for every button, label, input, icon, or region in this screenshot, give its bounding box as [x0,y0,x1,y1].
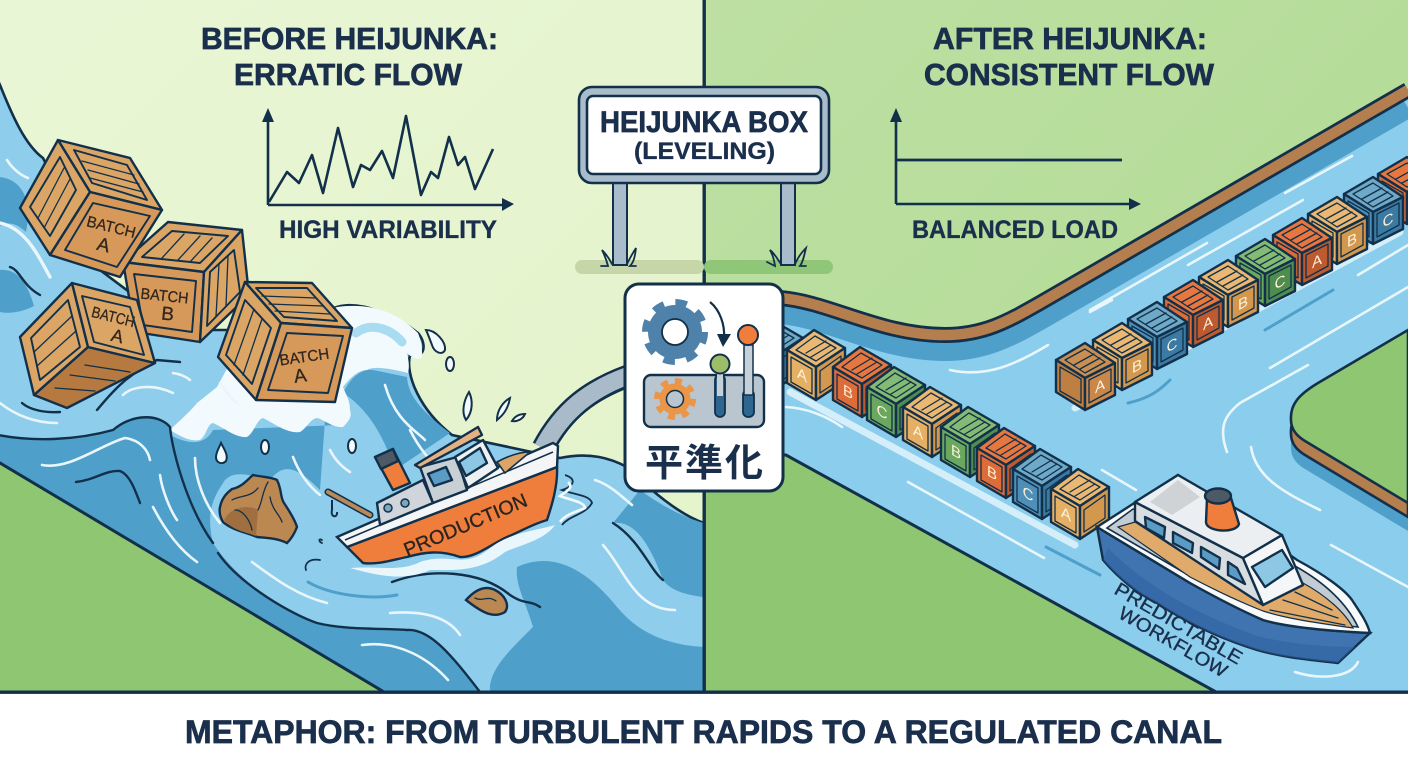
control panel [644,375,764,427]
connector pipe [543,376,628,452]
text: kanji label: 平準化 [645,432,763,487]
cube: B: B [987,462,997,485]
cube: C: C [1275,272,1285,294]
cube: C [1236,239,1295,306]
cube: C: C [1167,335,1177,357]
green island [1291,330,1408,531]
cube: C [1344,177,1403,244]
cube: A [1164,280,1223,347]
text: predictable workflow: WORKFLOW [1114,603,1231,682]
crate: batch A lower left: A [109,325,126,347]
cube: C [867,367,925,437]
heading: after heijunka: CONSISTENT FLOW [924,57,1215,92]
lower green bank [704,452,1216,692]
chart: balanced load [890,108,1141,244]
panel: after heijunka background [704,0,1408,692]
crate: batch A top [20,140,162,277]
crate: batch A right: A [292,365,308,388]
crate: batch A right [218,282,352,402]
chart label: high variability: HIGH VARIABILITY [279,216,497,244]
cube: A [1056,343,1115,410]
cube: B: B [951,441,961,464]
heading: before heijunka: ERRATIC FLOW [234,57,463,92]
deck and rail [1097,475,1370,633]
icon: slider orange [738,325,758,417]
boat: production tugboat: PRODUCTION [401,490,531,561]
panel: before heijunka background [0,0,704,692]
heading: after heijunka [924,21,1215,92]
hull [1097,527,1370,663]
foam around boat [350,475,592,576]
posts [613,182,627,265]
crate: batch A top: A [95,234,112,257]
crate: batch B: B [160,303,175,326]
rock: small [466,588,507,615]
card: leveling controls [625,284,783,491]
cube: A: A [797,364,807,387]
canal streaks [786,156,1408,587]
boat: production tugboat [328,427,558,563]
cube: C [1013,449,1071,519]
icon: orange gear [657,381,693,417]
signpost: heijunka box [575,87,833,274]
cube: B [1199,260,1258,327]
heading: before heijunka [201,21,498,92]
ground strip [575,260,704,274]
cube: A: A [1095,376,1105,397]
heading: before heijunka: BEFORE HEIJUNKA: [201,21,498,56]
cube: B [941,407,999,477]
panel: regulated canal [704,90,1408,692]
crate: batch A lower left [20,283,155,408]
chart label: balanced load: BALANCED LOAD [912,216,1118,244]
cube: B [833,347,891,417]
footer caption: METAPHOR: FROM TURBULENT RAPIDS TO A REGULATED CANAL [185,714,1222,750]
cube: C: C [1383,210,1393,232]
green lower-left bank [0,460,384,692]
crate: batch A lower left: BATCH [90,304,136,331]
sign text: HEIJUNKA BOX [600,106,808,139]
foam under cubes [790,392,1075,545]
cube: B: B [1132,356,1142,377]
cube: A [787,330,845,400]
shaded bank edge [780,108,1408,351]
lifted deck and cargo [497,452,530,473]
signpost: heijunka box: (LEVELING) [634,138,775,165]
cube: B: B [843,381,853,404]
cube: A: A [1203,313,1213,334]
cube: B [1093,323,1152,390]
dark water shapes [0,177,704,692]
footer band [0,690,1408,768]
panel: turbulent rapids [0,72,710,692]
cube row: upper canal [1056,157,1408,410]
cube: B [1308,197,1367,264]
icon: slider green [710,354,730,417]
cube: A [1051,469,1109,539]
cube: C: C [1023,483,1034,506]
river lines and streaks [0,160,675,692]
icon: blue gear [646,303,704,361]
cube: hidden [784,326,803,384]
crane arm [328,492,370,515]
sign board [579,87,829,183]
cube: A [903,387,961,457]
cube row: lower canal [784,326,1110,540]
icon: water drops [216,330,525,463]
center divider [702,0,706,692]
crate: batch B: BATCH [140,286,189,307]
cube: clipped [1378,157,1408,224]
chart: high variability [262,108,514,244]
canal water [784,99,1408,690]
cube: C: C [877,401,888,424]
cube: A: A [913,421,923,444]
boat: predictable workflow ferry [1097,475,1370,682]
heading: after heijunka: AFTER HEIJUNKA: [933,21,1207,56]
icon: curved arrow [710,302,731,347]
river water [0,72,710,692]
rock: large [220,475,297,543]
cube: B: B [1238,293,1248,314]
text: predictable workflow: PREDICTABLE [1110,579,1246,669]
brown canal bank [704,90,1408,335]
cube: C [1128,302,1187,369]
wheelhouse [420,457,467,503]
grass [601,248,636,266]
cabin [1135,502,1263,605]
cube: A: A [1312,251,1322,272]
cube: A: A [1061,503,1071,526]
cube: B [977,428,1035,498]
funnel [375,449,410,490]
cube: A [1273,218,1332,285]
crate: batch B [123,222,249,342]
crate: batch A right: BATCH [278,346,330,369]
foam crest [170,306,422,440]
cube: B: B [1347,230,1357,251]
crate: batch A top: BATCH [85,213,137,242]
